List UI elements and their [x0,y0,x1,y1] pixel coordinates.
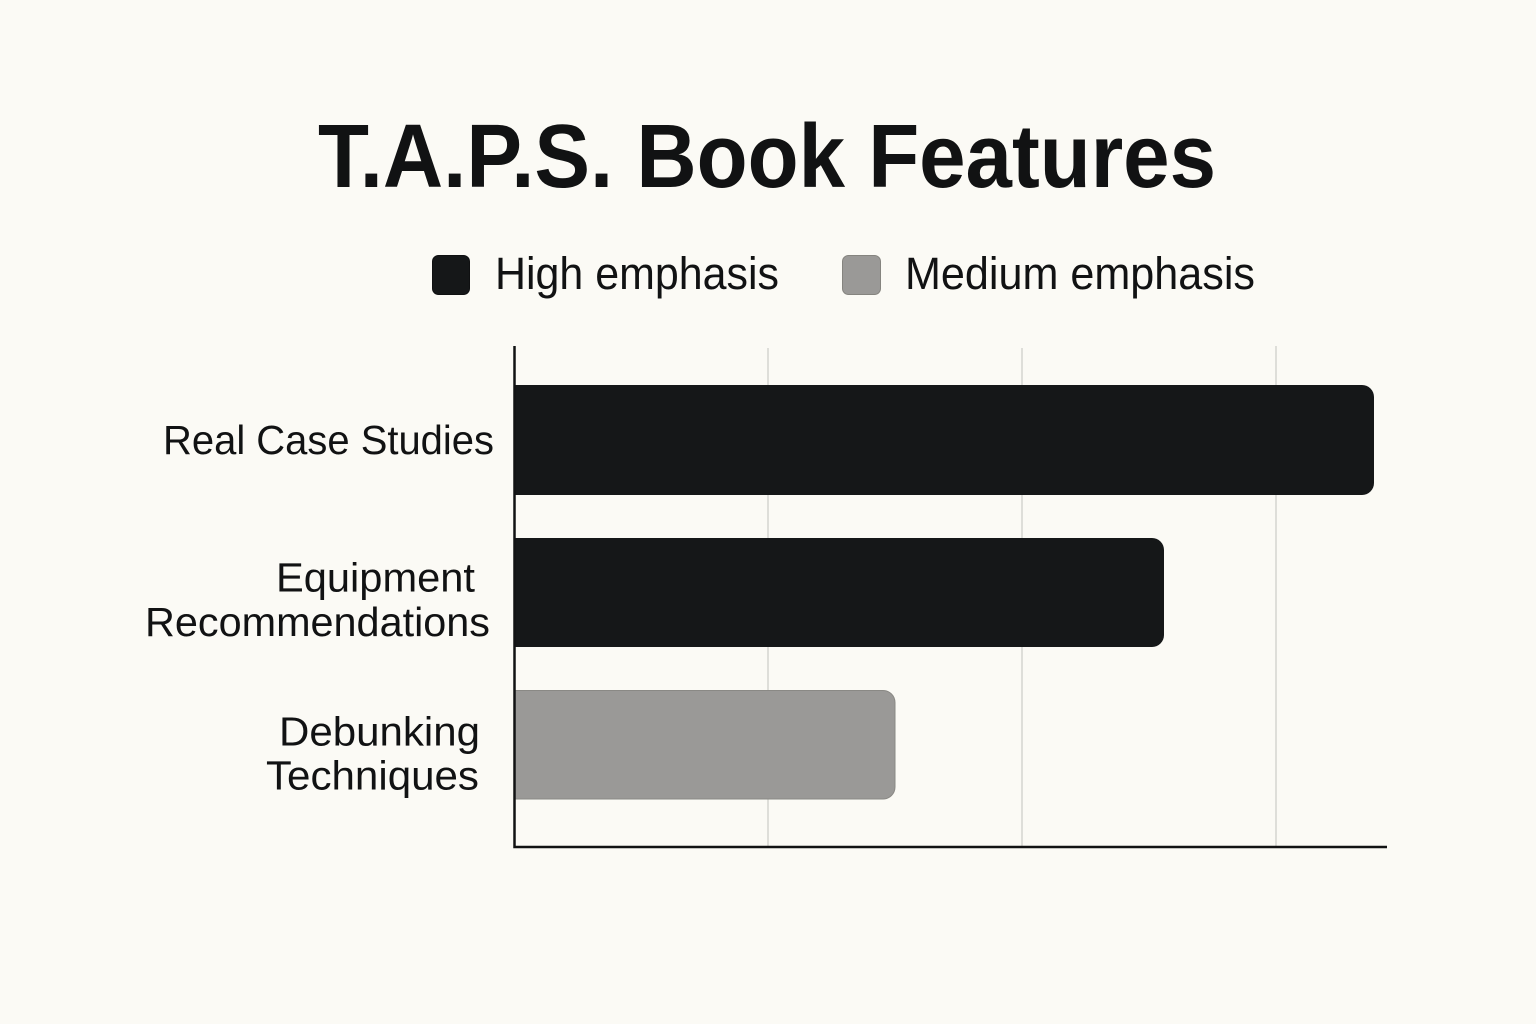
title: T.A.P.S. Book Features [318,107,1216,207]
label: Equipment Recommendations: Equipment [276,554,476,600]
axes [514,346,1387,847]
label: Debunking Techniques: Debunking [279,708,480,754]
bar chart [145,346,1387,847]
label: Real Case Studies: Real Case Studies [163,417,494,463]
label: Debunking Techniques: Techniques [266,752,479,798]
legend [432,248,1255,299]
bar: Real Case Studies [515,385,1374,495]
legend item: medium emphasis: Medium emphasis [905,248,1255,299]
legend item: high emphasis: High emphasis [495,248,779,299]
bar: Equipment Recommendations [515,538,1164,647]
label: Equipment Recommendations: Recommendations [145,599,490,645]
label: Equipment Recommendations [145,554,490,645]
bar: Debunking Techniques [515,690,895,799]
label: Debunking Techniques [266,708,480,798]
